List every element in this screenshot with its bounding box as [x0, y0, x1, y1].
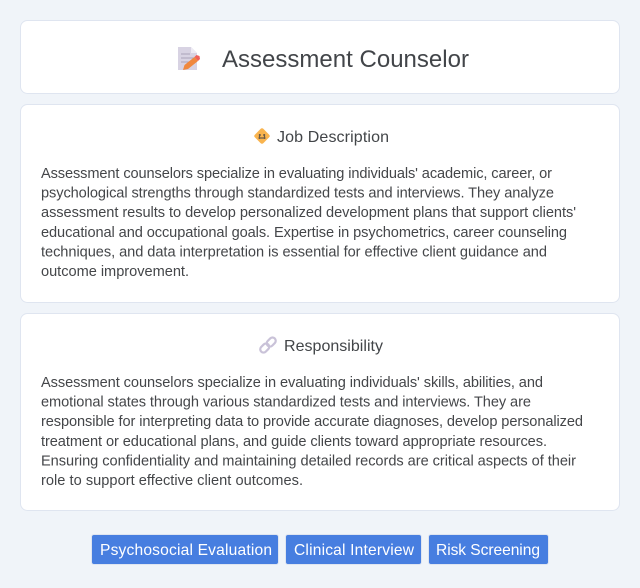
text block: job description: outcome improvement. [41, 264, 189, 280]
text block: responsibility: responsible for interpreting data to provide accurate diagnoses, develop personalized [41, 414, 583, 430]
text block: responsibility: role to support effective client outcomes. [41, 473, 303, 489]
title: Assessment Counselor [222, 46, 469, 73]
panel: job description [20, 104, 620, 302]
tag: risk screening: Risk Screening [436, 542, 540, 559]
text block: job description: educational and occupational goals. Expertise in psychometrics, career counseling [41, 225, 567, 241]
text block: job description: assessment results to develop personalized development plans that support clients' [41, 205, 576, 221]
panel: responsibility [20, 314, 620, 510]
tag: risk screening [428, 534, 548, 564]
text block: job description: techniques, and data interpretation is essential for effective client guidance and [41, 244, 547, 260]
text block: responsibility: Ensuring confidentiality and maintaining detailed records are critical aspects of their [41, 453, 576, 469]
text block: responsibility [41, 375, 583, 489]
tag: clinical interview: Clinical Interview [294, 542, 415, 559]
heading: job description: Job Description [277, 129, 389, 146]
tag: clinical interview [286, 534, 422, 564]
icon: chain link [259, 336, 277, 354]
heading: responsibility: Responsibility [284, 338, 383, 355]
text block: job description: Assessment counselors specialize in evaluating individuals' academic, career, or [41, 166, 552, 182]
tag: psychosocial evaluation [92, 534, 278, 564]
icon: document with pencil [178, 47, 200, 70]
text block: responsibility: emotional states through various standardized tests and interviews. They are [41, 395, 531, 411]
tag: psychosocial evaluation: Psychosocial Evaluation [100, 542, 272, 559]
text block: responsibility: treatment or educational plans, and guide clients toward appropriate resources. [41, 434, 547, 450]
text block: job description: psychological strengths through standardized tests and interviews. They analyze [41, 186, 554, 202]
text block: job description [41, 166, 576, 280]
panel: title card [20, 20, 620, 94]
text block: responsibility: Assessment counselors specialize in evaluating individuals' skills, abilities, and [41, 375, 543, 391]
icon: orange diamond [254, 128, 270, 144]
